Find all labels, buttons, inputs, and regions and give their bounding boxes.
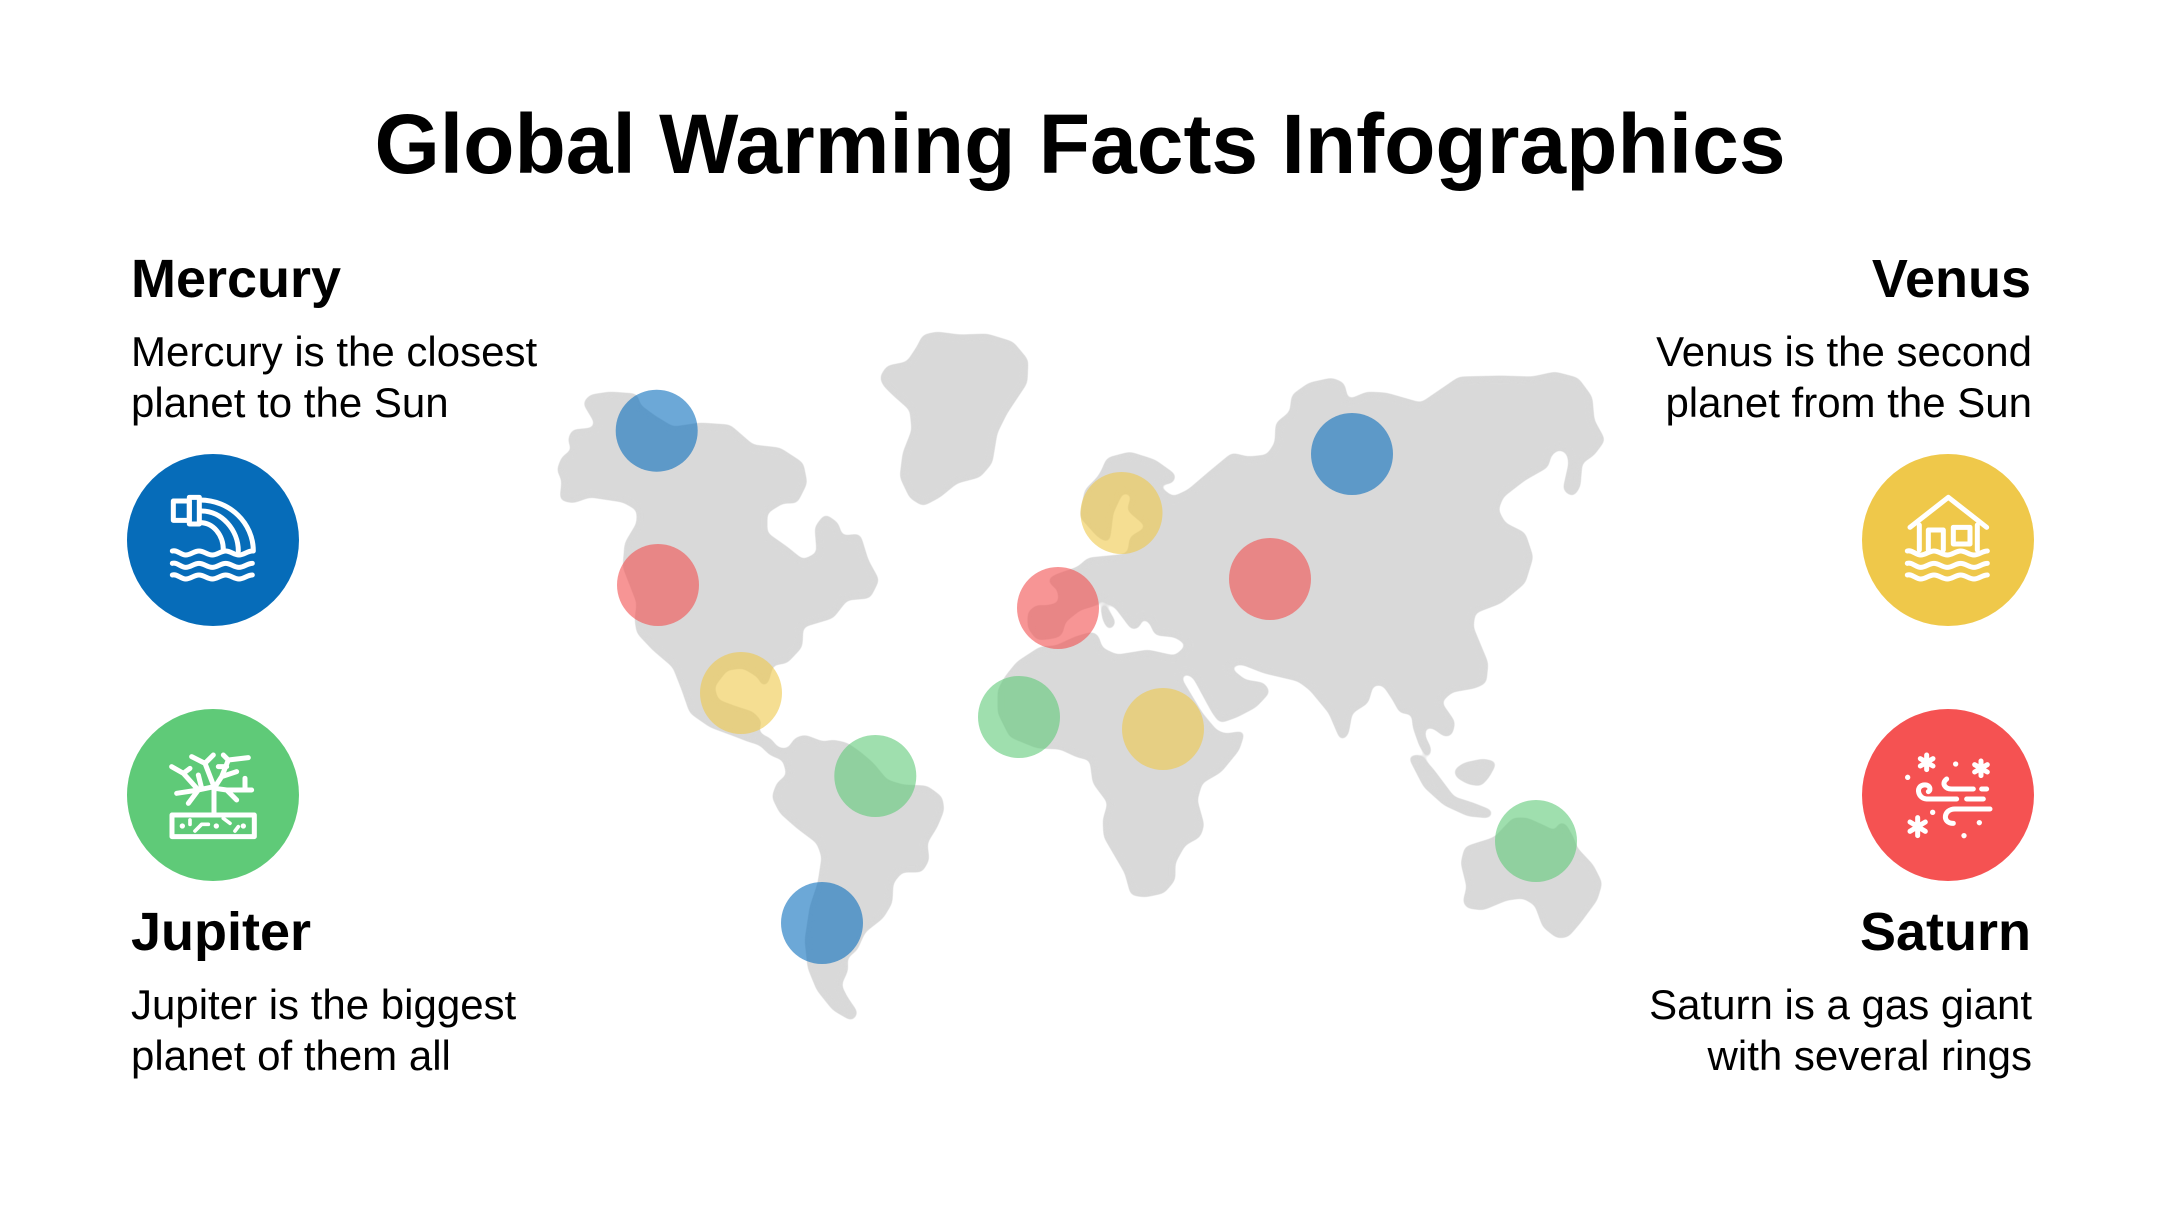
- text: Mercury description: Mercury is the closest: [131, 328, 537, 375]
- heading: Saturn: Saturn: [1860, 902, 2031, 962]
- continent: Europe, Asia and Africa: [998, 372, 1605, 897]
- island: Borneo: [1454, 759, 1497, 786]
- title: Global Warming Facts Infographics: [374, 97, 1786, 191]
- marker: yellow, Europe: [1080, 472, 1162, 554]
- icon: drain pipe over water: [172, 497, 253, 579]
- text: Saturn description: Saturn is a gas giant: [1649, 981, 2032, 1028]
- icon disc: Mercury: [127, 454, 299, 626]
- marker: blue, South America: [781, 882, 863, 964]
- icon: flooded house: [1907, 497, 1987, 579]
- marker: yellow, East Africa: [1122, 688, 1204, 770]
- icon: wind and snow: [1905, 755, 1990, 838]
- marker: red, Central Asia: [1229, 538, 1311, 620]
- continent: Australia: [1461, 818, 1602, 938]
- marker: blue, Siberia: [1311, 413, 1393, 495]
- text: Jupiter description: planet of them all: [131, 1032, 451, 1079]
- world map: [557, 332, 1605, 1021]
- icon disc: Venus: [1862, 454, 2034, 626]
- heading: Venus: Venus: [1872, 249, 2031, 309]
- icon disc: Saturn: [1862, 709, 2034, 881]
- marker: green, West Africa: [978, 676, 1060, 758]
- island: Sumatra and Java: [1408, 755, 1493, 818]
- heading: Mercury: Mercury: [131, 249, 341, 309]
- icon: dead tree on cracked soil: [172, 755, 254, 837]
- map markers: [616, 390, 1577, 964]
- marker: green, South America: [834, 735, 916, 817]
- marker: blue, North America: [616, 390, 698, 472]
- text: Venus description: Venus is the second: [1656, 328, 2032, 375]
- panel: Venus: [1656, 249, 2034, 626]
- continent: the Americas: [557, 392, 944, 1021]
- marker: yellow, Central America: [700, 652, 782, 734]
- panel: Saturn: [1649, 709, 2034, 1079]
- text: Saturn description: with several rings: [1707, 1032, 2032, 1079]
- text: Jupiter description: Jupiter is the biggest: [131, 981, 517, 1028]
- marker: red, North America: [617, 544, 699, 626]
- marker: green, Australia: [1495, 800, 1577, 882]
- text: Mercury description: planet to the Sun: [131, 379, 449, 426]
- text: Venus description: planet from the Sun: [1665, 379, 2032, 426]
- continent: Greenland: [880, 332, 1028, 506]
- icon disc: Jupiter: [127, 709, 299, 881]
- panel: Mercury: [127, 249, 537, 626]
- heading: Jupiter: Jupiter: [131, 902, 311, 962]
- panel: Jupiter: [127, 709, 517, 1079]
- marker: red, Iberia: [1017, 567, 1099, 649]
- island: Italy: [1100, 603, 1116, 631]
